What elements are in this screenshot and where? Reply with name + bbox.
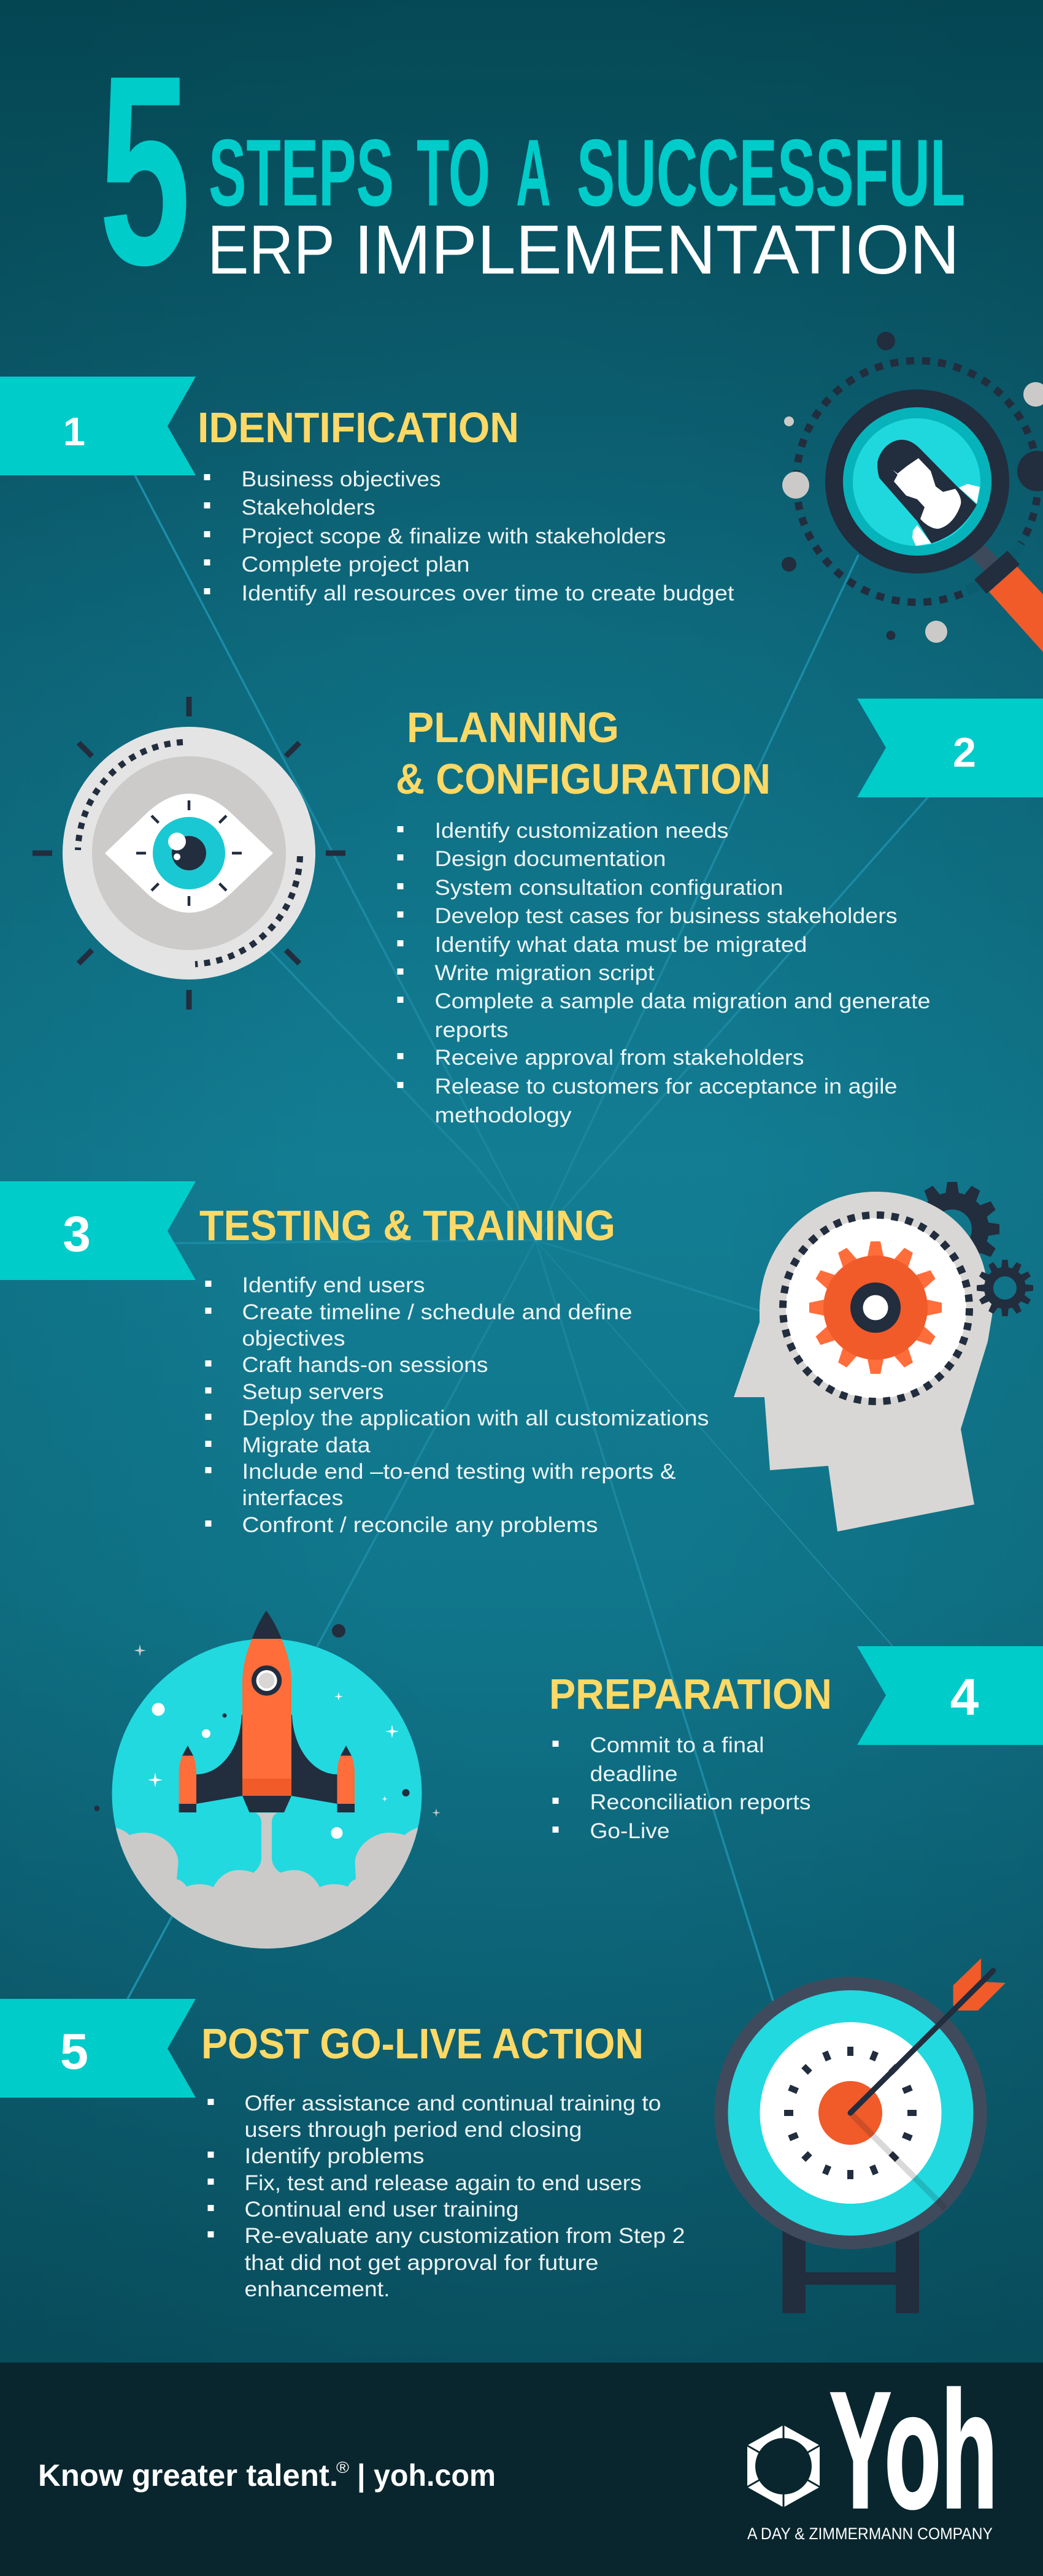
step 2 list xyxy=(398,819,930,1127)
outer dial xyxy=(63,727,315,979)
dashed arcs xyxy=(78,742,300,964)
step 5 list: Continual end user training xyxy=(244,2198,519,2221)
step 2 list: Develop test cases for business stakeholders xyxy=(434,904,897,928)
step 1 list: Stakeholders xyxy=(242,496,375,519)
step 2 list: Design documentation xyxy=(434,847,666,871)
step 2 list: methodology xyxy=(434,1103,572,1127)
engine xyxy=(242,1796,291,1812)
tagline xyxy=(38,2458,496,2493)
step 5 list: Re-evaluate any customization from Step 2 xyxy=(244,2224,685,2248)
arrow shaft xyxy=(850,1971,993,2113)
step 3 list: Confront / reconcile any problems xyxy=(242,1513,598,1537)
iris and pupil xyxy=(153,817,225,889)
tagline: Know greater talent. xyxy=(38,2458,338,2493)
step 2 list: Receive approval from stakeholders xyxy=(434,1046,804,1070)
title line one xyxy=(209,120,965,226)
step 2 ribbon: 2 xyxy=(953,729,976,776)
handle xyxy=(971,545,1043,652)
rocket body xyxy=(242,1639,291,1796)
outer ticks xyxy=(33,697,345,1010)
step 3 list: interfaces xyxy=(242,1486,344,1510)
title line one: TO xyxy=(417,120,490,226)
step 5 list: enhancement. xyxy=(244,2277,390,2301)
lens xyxy=(825,389,1009,573)
title line two: IMPLEMENTATION xyxy=(354,211,960,288)
title xyxy=(99,20,965,321)
step 1 list: Business objectives xyxy=(242,467,441,491)
step 4 ribbon: 4 xyxy=(950,1668,979,1726)
step 2 list: Identify customization needs xyxy=(434,819,729,843)
connecting rays xyxy=(128,475,928,2001)
step 2 heading: PLANNING xyxy=(407,703,619,751)
white disc with dashed ring xyxy=(786,1218,966,1398)
orbit dots xyxy=(782,332,1043,643)
icon: magnifying glass xyxy=(782,332,1043,652)
dashed ring xyxy=(796,361,1038,602)
step 2 list: Complete a sample data migration and generate xyxy=(434,989,930,1013)
icon: rocket xyxy=(94,1611,441,1963)
step 3 list: objectives xyxy=(242,1327,345,1351)
step 2 list: Write migration script xyxy=(434,961,655,985)
step 3 heading: TESTING & TRAINING xyxy=(199,1202,615,1249)
left booster xyxy=(179,1746,196,1812)
title line two: ERP xyxy=(207,211,335,288)
step 1 ribbon: 1 xyxy=(63,409,85,454)
large dark gear xyxy=(905,1182,999,1276)
step 5 list: users through period end closing xyxy=(244,2118,582,2142)
planet xyxy=(112,1639,422,1949)
icon: target with arrow xyxy=(714,1958,1006,2313)
rocket nose xyxy=(252,1611,282,1639)
step 5 list: Offer assistance and continual training to xyxy=(244,2091,661,2115)
step 5 heading: POST GO-LIVE ACTION xyxy=(201,2020,644,2068)
step 4 list xyxy=(552,1733,811,1843)
body band xyxy=(242,1779,291,1796)
rocket wings xyxy=(196,1715,337,1804)
arrow shadow xyxy=(850,2113,945,2209)
step 4 list: Go-Live xyxy=(590,1819,670,1843)
step 5 list: Identify problems xyxy=(244,2144,425,2168)
step 3 list: Identify end users xyxy=(242,1273,425,1297)
step 4 list: Reconciliation reports xyxy=(590,1790,811,1814)
ring gap at handle xyxy=(967,543,1021,591)
head silhouette xyxy=(734,1192,993,1531)
step 1 heading: IDENTIFICATION xyxy=(198,404,519,451)
big numeral 5: 5 xyxy=(99,20,191,321)
logo mark xyxy=(745,2423,822,2510)
step 3 list xyxy=(205,1273,709,1537)
right booster xyxy=(337,1746,355,1812)
icon: eye xyxy=(33,697,345,1010)
step 1 ribbon xyxy=(0,377,196,475)
stars and dots xyxy=(94,1624,441,1839)
small dark gear xyxy=(977,1260,1033,1316)
step 4 heading: PREPARATION xyxy=(549,1670,832,1718)
step 3 list: Deploy the application with all customizations xyxy=(242,1406,709,1430)
footer band xyxy=(0,2358,1043,2576)
step 2 list: System consultation configuration xyxy=(434,876,783,900)
step 4 list: Commit to a final xyxy=(590,1733,764,1757)
step 1 list: Identify all resources over time to create budget xyxy=(242,581,734,605)
step 5 text xyxy=(201,2020,685,2301)
step 2 heading: & CONFIGURATION xyxy=(396,755,771,803)
step 1 list xyxy=(204,467,734,605)
exhaust cloud xyxy=(115,1813,418,1949)
step 4 list: deadline xyxy=(590,1762,677,1786)
step 3 list: Setup servers xyxy=(242,1380,384,1404)
step 3 list: Create timeline / schedule and define xyxy=(242,1300,632,1324)
person in lens xyxy=(877,440,980,546)
title line one: A xyxy=(516,120,551,226)
tagline: ® xyxy=(336,2458,349,2477)
title line one: STEPS xyxy=(209,120,394,226)
step 3 list: Include end –to-end testing with reports & xyxy=(242,1460,676,1484)
step 5 list: Fix, test and release again to end users xyxy=(244,2171,642,2195)
target rings xyxy=(714,1977,987,2249)
step 4 ribbon xyxy=(857,1646,1043,1745)
orange gear xyxy=(809,1241,942,1374)
eye shape xyxy=(105,794,273,913)
step 2 list: Identify what data must be migrated xyxy=(434,933,807,957)
step 2 text xyxy=(396,703,930,1127)
step 3 ribbon: 3 xyxy=(63,1206,91,1262)
stand xyxy=(783,2220,919,2313)
icon: head with gears xyxy=(734,1182,1033,1531)
step 5 ribbon: 5 xyxy=(60,2023,88,2080)
step 3 list: Craft hands-on sessions xyxy=(242,1353,488,1377)
step 3 list: Migrate data xyxy=(242,1433,371,1457)
step 2 heading xyxy=(396,703,771,803)
step 5 ribbon xyxy=(0,1999,196,2098)
step 3 text xyxy=(199,1202,709,1537)
logo tagline: A DAY & ZIMMERMANN COMPANY xyxy=(747,2524,993,2543)
inner ticks xyxy=(136,800,242,906)
step 5 list xyxy=(207,2091,685,2301)
arrow fletching xyxy=(953,1958,1006,2011)
step 1 list: Project scope & finalize with stakeholders xyxy=(242,524,666,548)
step 4 text xyxy=(549,1670,832,1843)
step 2 list: reports xyxy=(434,1018,508,1042)
bullseye xyxy=(818,2081,882,2145)
step 2 ribbon xyxy=(857,699,1043,797)
step 2 list: Release to customers for acceptance in agile xyxy=(434,1075,897,1098)
step 1 text xyxy=(198,404,734,605)
dial ticks xyxy=(784,2047,917,2179)
tagline: | yoh.com xyxy=(357,2458,496,2493)
step 5 list: that did not get approval for future xyxy=(244,2251,599,2275)
step 1 list: Complete project plan xyxy=(242,553,470,577)
step 3 ribbon xyxy=(0,1181,196,1280)
window xyxy=(252,1665,282,1696)
